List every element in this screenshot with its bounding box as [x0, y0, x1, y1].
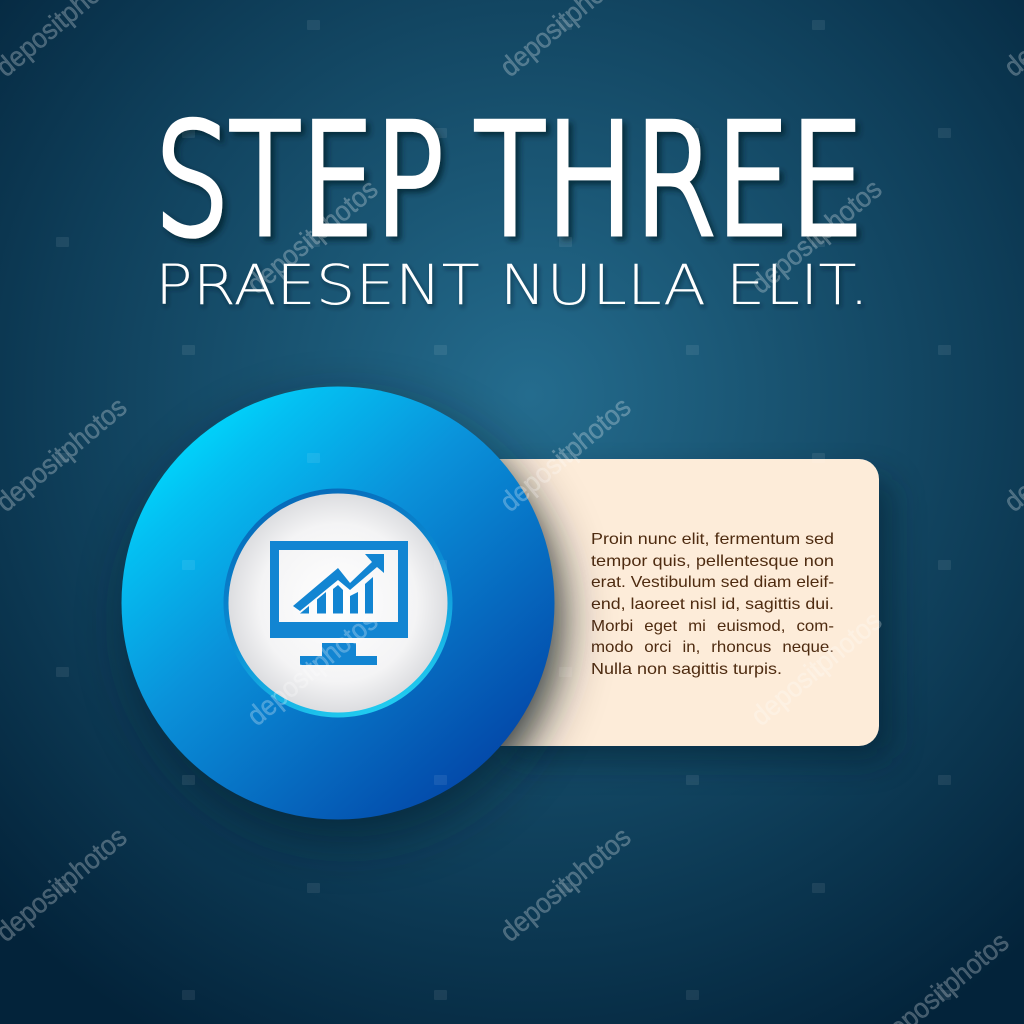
card body text: [591, 531, 834, 678]
watermark text: depositphotos: [241, 173, 383, 300]
card body text: erat. Vestibulum sed diam eleif-: [591, 574, 834, 591]
icon: monitor with rising chart: [270, 541, 408, 665]
card body text: Nulla non sagittis turpis.: [591, 661, 782, 678]
card body text: modo orci in, rhoncus neque.: [591, 639, 834, 656]
watermark text: depositphotos: [494, 391, 636, 518]
card body text: Proin nunc elit, fermentum sed: [591, 531, 834, 548]
card body text: Morbi eget mi euismod, com-: [591, 618, 834, 635]
title: [155, 92, 864, 269]
subtitle: PRAESENT NULLA ELIT.: [155, 253, 869, 317]
card body text: tempor quis, pellentesque non: [591, 553, 834, 570]
title: STEP: [155, 92, 445, 269]
watermark text: depositphotos: [241, 605, 383, 732]
inner white disc: [228, 494, 448, 712]
watermark text: depositphotos: [745, 605, 887, 732]
panel: blue circle badge: [122, 386, 562, 838]
panel: text card: [500, 459, 900, 771]
watermark text: depositphotos: [494, 821, 636, 948]
watermark text: depositphotos: [745, 173, 887, 300]
inner ring: [224, 488, 452, 718]
title: THREE: [474, 92, 864, 269]
card body text: end, laoreet nisl id, sagittis dui.: [591, 596, 834, 613]
